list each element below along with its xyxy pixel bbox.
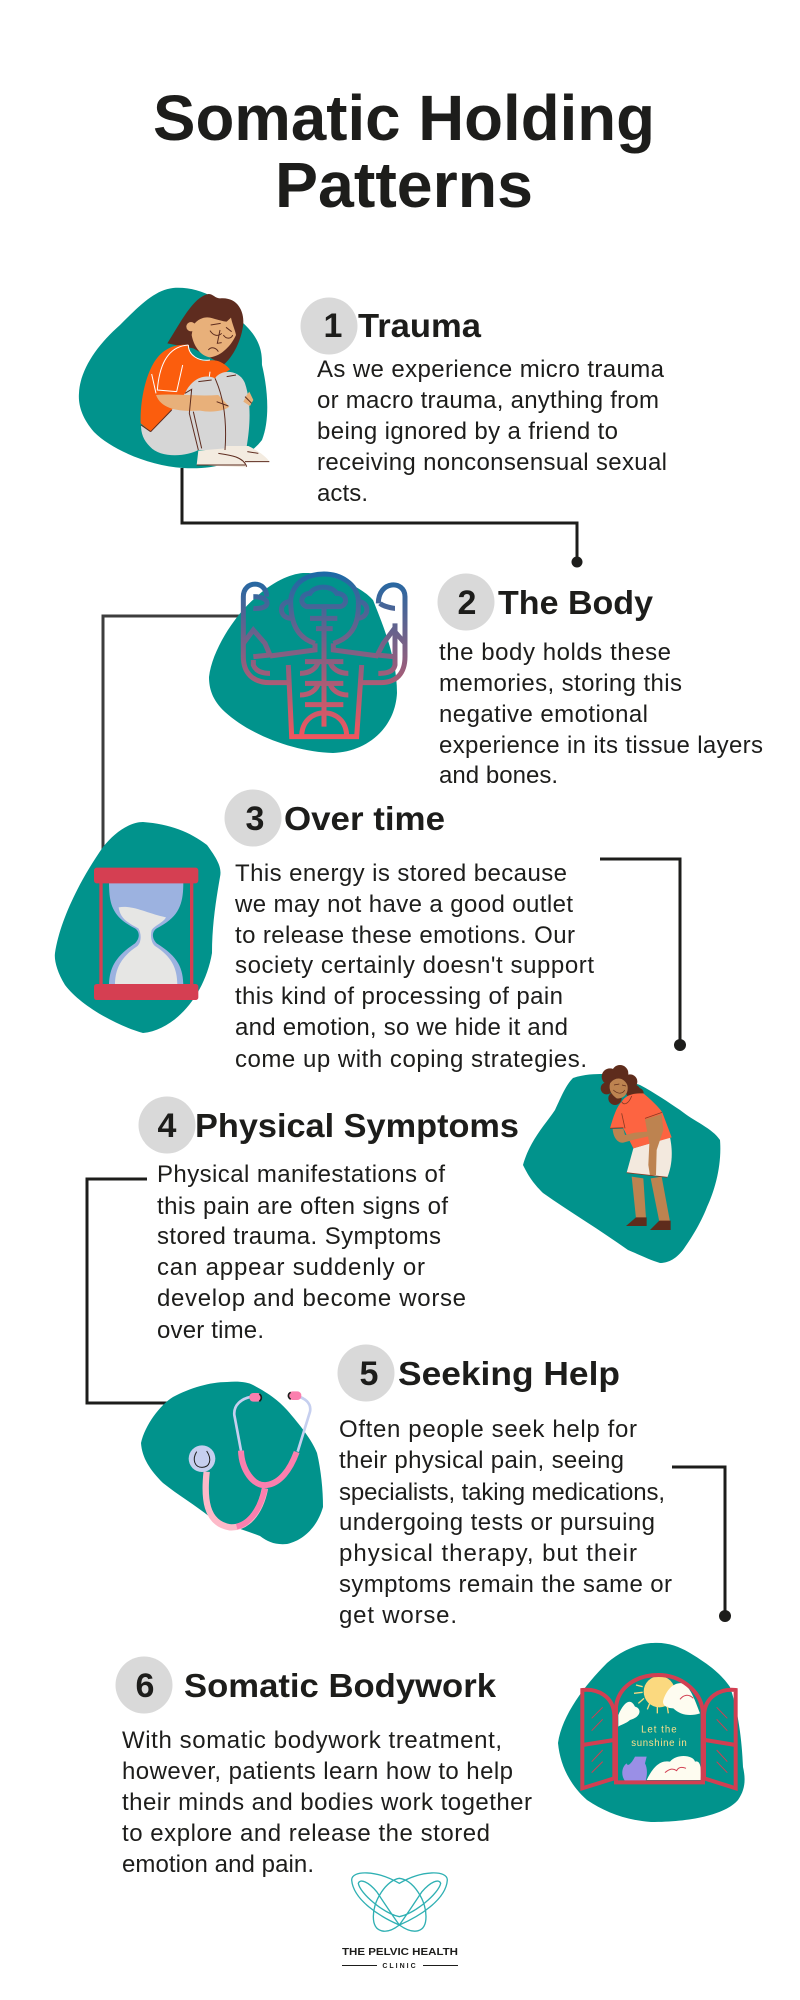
number badge 4: 4 <box>158 1107 177 1145</box>
panel: the body <box>209 573 763 789</box>
text: physical symptoms description: develop and become worse <box>157 1285 466 1312</box>
illustration: open window with sun: sunshine in <box>631 1738 687 1749</box>
text: physical symptoms description: stored trauma. Symptoms <box>157 1223 441 1250</box>
illustration: skeleton and nervous system <box>209 573 405 753</box>
text: trauma description: receiving nonconsensual sexual <box>317 449 667 476</box>
text: over time description: this kind of processing of pain <box>235 983 563 1010</box>
text: physical symptoms description: over time. <box>157 1317 264 1344</box>
connector: physical symptoms to seeking help <box>87 1179 170 1403</box>
illustration: open window with sun: Let the <box>641 1725 678 1736</box>
text: over time description: to release these emotions. Our <box>235 922 575 949</box>
text: physical symptoms description <box>157 1161 466 1344</box>
text: seeking help description: physical therapy, but their <box>339 1540 637 1567</box>
illustration: sad girl hugging knees <box>79 288 269 468</box>
connector: seeking help to somatic bodywork <box>672 1467 731 1622</box>
text: the body description: experience in its tissue layers <box>439 732 763 759</box>
text: over time description: This energy is stored because <box>235 860 567 887</box>
text: the body description: negative emotional <box>439 701 648 728</box>
text: the body description <box>439 639 763 789</box>
heading: trauma: Trauma <box>358 307 482 344</box>
illustration: stethoscope <box>141 1382 323 1544</box>
text: physical symptoms description: Physical manifestations of <box>157 1161 445 1188</box>
connector: trauma to the body <box>182 468 582 568</box>
illustration: open window with sun <box>558 1643 745 1822</box>
heading: seeking help: Seeking Help <box>398 1355 620 1392</box>
text: seeking help description <box>339 1416 672 1629</box>
number badge 4 <box>138 1096 196 1154</box>
number badge 5: 5 <box>360 1355 378 1393</box>
text: somatic bodywork description: to explore and release the stored <box>122 1820 490 1847</box>
number badge 6: 6 <box>136 1667 154 1705</box>
text: somatic bodywork description <box>122 1727 532 1878</box>
heading: somatic bodywork: Somatic Bodywork <box>184 1667 497 1704</box>
text: trauma description: acts. <box>317 480 368 507</box>
logo: the pelvic health clinic <box>342 1873 458 1970</box>
heading: physical symptoms: Physical Symptoms <box>195 1107 519 1144</box>
title <box>153 82 655 221</box>
text: over time description <box>234 860 594 1073</box>
number badge 5 <box>338 1344 394 1402</box>
panel: physical symptoms <box>138 1065 720 1344</box>
text: somatic bodywork description: however, patients learn how to help <box>122 1758 513 1785</box>
icon: teal knot <box>352 1873 447 1931</box>
number badge 1 <box>300 298 358 354</box>
text: seeking help description: undergoing tests or pursuing <box>339 1509 655 1536</box>
text: the body description: and bones. <box>439 762 558 789</box>
text: seeking help description: specialists, taking medications, <box>339 1479 665 1506</box>
connector: over time to physical symptoms <box>600 859 686 1051</box>
number badge 2 <box>438 574 494 630</box>
number badge 1: 1 <box>324 307 342 345</box>
title: Somatic Holding <box>153 82 655 154</box>
number badge 6 <box>116 1656 172 1714</box>
number badge 3: 3 <box>246 800 264 838</box>
text: seeking help description: get worse. <box>339 1602 457 1629</box>
panel: seeking help <box>141 1344 672 1629</box>
text: over time description: society certainly doesn't support <box>235 952 594 979</box>
text: the body description: the body holds these <box>439 639 671 666</box>
number badge 2: 2 <box>458 584 476 622</box>
text: the body description: memories, storing this <box>439 670 682 697</box>
text: trauma description: being ignored by a friend to <box>317 418 618 445</box>
connector: the body to over time <box>103 616 242 850</box>
panel: over time <box>55 790 594 1073</box>
text: somatic bodywork description: With somatic bodywork treatment, <box>122 1727 502 1754</box>
text: over time description: and emotion, so we hide it and <box>235 1014 568 1041</box>
heading: over time: Over time <box>284 800 445 837</box>
text: trauma description: or macro trauma, anything from <box>317 387 659 414</box>
text: somatic bodywork description: their minds and bodies work together <box>122 1789 532 1816</box>
illustration: woman holding her stomach <box>523 1065 720 1263</box>
text: over time description: come up with coping strategies. <box>235 1046 587 1073</box>
panel: somatic bodywork <box>116 1643 745 1878</box>
text: physical symptoms description: can appear suddenly or <box>157 1254 425 1281</box>
illustration: hourglass <box>55 822 220 1033</box>
text: over time description: we may not have a good outlet <box>234 891 573 918</box>
title: Patterns <box>275 149 533 221</box>
heading: the body: The Body <box>498 584 654 621</box>
text: seeking help description: symptoms remain the same or <box>339 1571 672 1598</box>
panel: trauma <box>79 288 667 507</box>
text: trauma description: As we experience micro trauma <box>317 356 665 383</box>
text: seeking help description: Often people seek help for <box>339 1416 637 1443</box>
text: trauma description <box>317 356 667 507</box>
text: physical symptoms description: this pain are often signs of <box>157 1193 448 1220</box>
logo: the pelvic health clinic: THE PELVIC HEALTH <box>342 1946 458 1958</box>
number badge 3 <box>224 790 282 846</box>
logo: the pelvic health clinic: CLINIC <box>382 1963 418 1970</box>
text: seeking help description: their physical pain, seeing <box>339 1447 624 1474</box>
text: somatic bodywork description: emotion and pain. <box>122 1851 314 1878</box>
